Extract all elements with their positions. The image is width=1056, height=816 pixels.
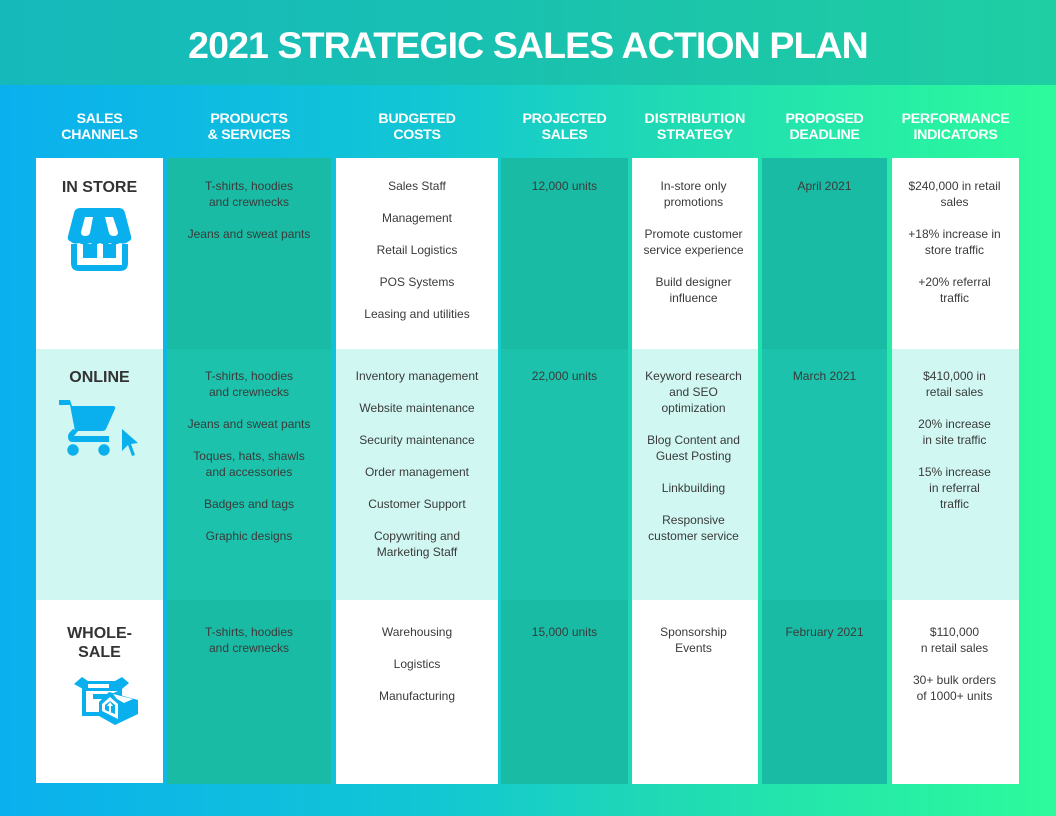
heading: budgeted costs: COSTS <box>393 127 441 143</box>
panel: online row tint, performance <box>892 349 1019 600</box>
text block: in store distribution <box>643 179 744 305</box>
text block: in store indicators: +20% referral <box>918 275 991 289</box>
text block: wholesale deadline: February 2021 <box>785 625 864 639</box>
text block: online distribution: Responsive <box>662 513 725 527</box>
text block: online indicators: traffic <box>940 497 969 511</box>
panel: online row tint, costs <box>336 349 498 600</box>
heading: products and services <box>208 111 290 143</box>
panel: performance column <box>892 158 1019 784</box>
heading: projected sales: PROJECTED <box>522 111 607 127</box>
heading: distribution strategy <box>645 111 745 143</box>
text block: wholesale distribution: Events <box>675 641 712 655</box>
text block: online costs: Copywriting and <box>374 529 460 543</box>
text block: wholesale distribution: Sponsorship <box>660 625 727 639</box>
text block: online distribution: customer service <box>648 529 739 543</box>
text block: in store indicators: traffic <box>940 291 969 305</box>
text block: wholesale products: T-shirts, hoodies <box>205 625 293 639</box>
text block: online distribution: Guest Posting <box>656 449 731 463</box>
text block: online costs: Inventory management <box>356 369 478 383</box>
text block: in store costs: Leasing and utilities <box>364 307 470 321</box>
text block: online projected sales: 22,000 units <box>532 369 597 383</box>
text block: online products: and crewnecks <box>209 385 289 399</box>
heading: distribution strategy: STRATEGY <box>657 127 733 143</box>
text block: online indicators: retail sales <box>926 385 983 399</box>
row label: wholesale: SALE <box>78 644 121 661</box>
text block: wholesale indicators: 30+ bulk orders <box>913 673 996 687</box>
text block: online distribution: Blog Content and <box>647 433 740 447</box>
text block: in store distribution: promotions <box>664 195 723 209</box>
text block: in store indicators: sales <box>940 195 968 209</box>
text block: wholesale costs: Logistics <box>394 657 440 671</box>
panel: projected sales column <box>501 158 628 784</box>
text block: in store costs: Management <box>382 211 452 225</box>
heading: budgeted costs: BUDGETED <box>378 111 456 127</box>
text block: wholesale products <box>205 625 293 655</box>
text block: online distribution: Keyword research <box>645 369 742 383</box>
text block: wholesale indicators: $110,000 <box>930 625 979 639</box>
text block: online indicators: 15% increase <box>918 465 991 479</box>
icon: open boxes <box>74 677 138 725</box>
row label: wholesale: WHOLE- <box>67 625 132 642</box>
text block: in store costs: Sales Staff <box>388 179 446 193</box>
text block: wholesale indicators: n retail sales <box>921 641 988 655</box>
text block: in store projected sales: 12,000 units <box>532 179 597 193</box>
text block: online indicators: in referral <box>929 481 980 495</box>
heading: proposed deadline: PROPOSED <box>785 111 864 127</box>
heading: performance indicators <box>902 111 1010 143</box>
heading: distribution strategy: DISTRIBUTION <box>645 111 745 127</box>
text block: in store products: T-shirts, hoodies <box>205 179 293 193</box>
heading: products and services: PRODUCTS <box>210 111 288 127</box>
text block: online products: Badges and tags <box>204 497 294 511</box>
text block: online indicators: $410,000 in <box>923 369 986 383</box>
text block: online products: Graphic designs <box>206 529 292 543</box>
text block: wholesale costs: Manufacturing <box>379 689 455 703</box>
text block: online costs: Marketing Staff <box>377 545 457 559</box>
text block: online distribution: optimization <box>661 401 726 415</box>
heading: sales channels: CHANNELS <box>61 127 138 143</box>
panel: deadline column <box>762 158 887 784</box>
text block: in store indicators: $240,000 in retail <box>908 179 1001 193</box>
text block: online products: T-shirts, hoodies <box>205 369 293 383</box>
text block: online costs: Website maintenance <box>359 401 475 415</box>
panel: sales channels column <box>36 158 163 783</box>
text block: online indicators: in site traffic <box>923 433 986 447</box>
text block: in store products <box>188 179 310 241</box>
text block: online distribution <box>645 369 742 543</box>
text block: wholesale costs <box>379 625 455 703</box>
text block: in store distribution: service experience <box>643 243 744 257</box>
heading: sales channels <box>61 111 138 143</box>
row label: wholesale <box>67 625 132 661</box>
row label: online: ONLINE <box>69 369 130 386</box>
text block: wholesale products: and crewnecks <box>209 641 289 655</box>
text block: in store products: Jeans and sweat pants <box>188 227 310 241</box>
heading: sales channels: SALES <box>77 111 122 127</box>
text block: online distribution: and SEO <box>669 385 718 399</box>
panel: products column <box>167 158 331 784</box>
text block: online products: and accessories <box>206 465 292 479</box>
panel: online row tint, distribution <box>632 349 758 600</box>
text block: in store costs <box>364 179 470 321</box>
text block: in store indicators: +18% increase in <box>908 227 1001 241</box>
text block: in store indicators: store traffic <box>925 243 984 257</box>
text block: in store distribution: influence <box>669 291 718 305</box>
heading: proposed deadline: DEADLINE <box>789 127 860 143</box>
text block: online costs: Security maintenance <box>359 433 475 447</box>
text block: online indicators: 20% increase <box>918 417 991 431</box>
text block: in store distribution: Promote customer <box>644 227 743 241</box>
text block: in store costs: POS Systems <box>380 275 454 289</box>
text block: online deadline: March 2021 <box>793 369 856 383</box>
heading: projected sales <box>522 111 607 143</box>
heading: projected sales: SALES <box>542 127 587 143</box>
heading: performance indicators: PERFORMANCE <box>902 111 1009 127</box>
text block: online costs: Customer Support <box>368 497 466 511</box>
text block: online indicators <box>918 369 991 511</box>
title: 2021 STRATEGIC SALES ACTION PLAN <box>188 24 868 66</box>
panel: budgeted costs column <box>336 158 498 784</box>
heading: products and services: & SERVICES <box>208 127 290 143</box>
text block: online products: Jeans and sweat pants <box>188 417 310 431</box>
text block: wholesale indicators: of 1000+ units <box>917 689 992 703</box>
panel: online row tint, channels <box>36 349 163 600</box>
heading: budgeted costs <box>378 111 456 143</box>
text block: wholesale projected sales: 15,000 units <box>532 625 597 639</box>
text block: in store deadline: April 2021 <box>797 179 852 193</box>
text block: online products: Toques, hats, shawls <box>193 449 305 463</box>
icon: shopping cart with cursor <box>59 400 138 456</box>
text block: in store distribution: Build designer <box>655 275 732 289</box>
icon: storefront <box>68 208 132 271</box>
panel: distribution column <box>632 158 758 784</box>
text block: wholesale distribution <box>660 625 727 655</box>
text block: wholesale indicators <box>913 625 996 703</box>
text block: online costs: Order management <box>365 465 469 479</box>
header band <box>0 0 1056 85</box>
text block: wholesale costs: Warehousing <box>382 625 452 639</box>
text block: online distribution: Linkbuilding <box>662 481 725 495</box>
text block: in store products: and crewnecks <box>209 195 289 209</box>
text block: online costs <box>356 369 478 559</box>
heading: performance indicators: INDICATORS <box>914 127 997 143</box>
text block: in store indicators <box>908 179 1001 305</box>
heading: proposed deadline <box>785 111 864 143</box>
row label: in store: IN STORE <box>62 179 137 196</box>
text block: in store costs: Retail Logistics <box>377 243 457 257</box>
text block: in store distribution: In-store only <box>660 179 727 193</box>
text block: online products <box>188 369 310 543</box>
